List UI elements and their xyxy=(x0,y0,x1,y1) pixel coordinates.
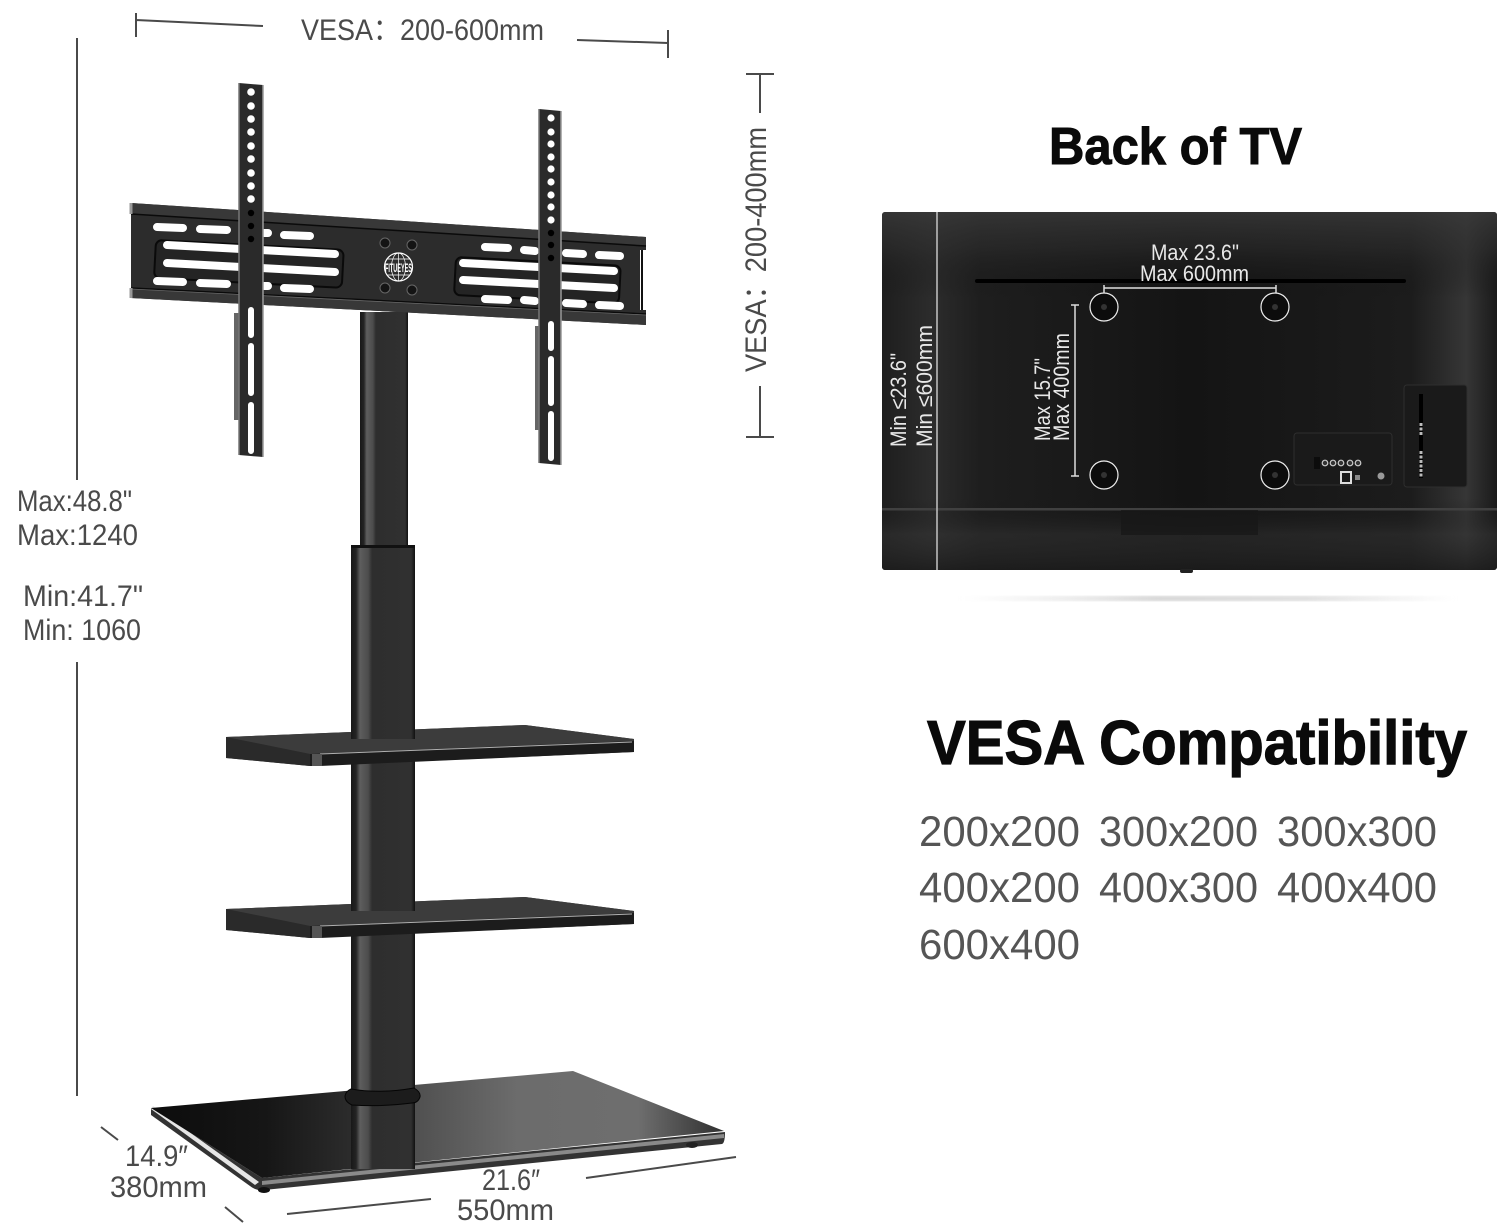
base width and depth dimensions xyxy=(101,1127,736,1222)
VESA width bracket xyxy=(1104,285,1276,293)
VESA size list: 400x300 xyxy=(1099,864,1258,912)
stand cover xyxy=(1121,510,1258,535)
lower shelf xyxy=(226,897,634,938)
VESA size list: 400x400 xyxy=(1277,864,1437,912)
height labels: Max:1240 xyxy=(17,519,138,552)
VESA height bracket xyxy=(1071,305,1079,476)
TV labels: Max 400mm xyxy=(1049,333,1074,441)
height labels: Min: 1060 xyxy=(23,614,141,647)
upper pole xyxy=(360,312,408,547)
logo: FITUEYES: FITUEYES xyxy=(385,261,412,275)
upper shelf xyxy=(226,722,634,766)
TV floor shadow xyxy=(959,596,1456,601)
height labels: Min:41.7" xyxy=(23,580,143,613)
mounting plate xyxy=(131,203,646,325)
VESA size list: 200x200 xyxy=(919,808,1080,856)
VESA size list: 600x400 xyxy=(919,921,1080,969)
side connector panel xyxy=(1404,385,1467,487)
VESA height dimension: VESA：200-400mm xyxy=(740,127,773,372)
TV labels: Max 600mm xyxy=(1140,261,1249,286)
plate slot frames xyxy=(154,240,344,288)
VESA width dimension: VESA：200-600mm xyxy=(301,14,544,47)
VESA width dimension xyxy=(136,13,668,58)
base labels: 14.9″ xyxy=(125,1140,188,1173)
glass base xyxy=(151,1071,725,1193)
logo: FITUEYES xyxy=(380,238,417,295)
height labels xyxy=(17,485,143,647)
TV labels xyxy=(886,240,1249,447)
height labels: Max:48.8" xyxy=(17,485,132,518)
left height dimension line xyxy=(76,38,78,1096)
top slot xyxy=(975,279,1406,283)
heading: Back of TV: Back of TV xyxy=(1049,118,1302,176)
right bracket xyxy=(535,109,561,465)
VESA size list: 400x200 xyxy=(919,864,1080,912)
mount circles xyxy=(1090,293,1289,489)
base labels: 380mm xyxy=(110,1171,207,1204)
VESA size list xyxy=(919,808,1437,969)
base labels xyxy=(110,1140,554,1225)
TV labels: Max 15.7" xyxy=(1030,358,1055,441)
heading: VESA Compatibility: VESA Compatibility xyxy=(927,709,1467,778)
base labels: 21.6″ xyxy=(482,1164,540,1197)
TV labels: Min ≤600mm xyxy=(912,325,937,447)
plate slots xyxy=(157,227,620,306)
TV stand illustration xyxy=(131,83,725,1193)
TV labels: Min ≤23.6" xyxy=(886,353,911,447)
base collar xyxy=(345,1088,420,1106)
TV labels: Max 23.6" xyxy=(1151,240,1239,265)
min height line xyxy=(936,212,938,570)
panel: back of TV xyxy=(882,212,1497,573)
connector panel xyxy=(1294,433,1392,485)
VESA size list: 300x200 xyxy=(1099,808,1258,856)
VESA size list: 300x300 xyxy=(1277,808,1437,856)
left bracket xyxy=(234,83,263,457)
TV body xyxy=(882,212,1497,570)
lower pole xyxy=(351,547,415,1092)
